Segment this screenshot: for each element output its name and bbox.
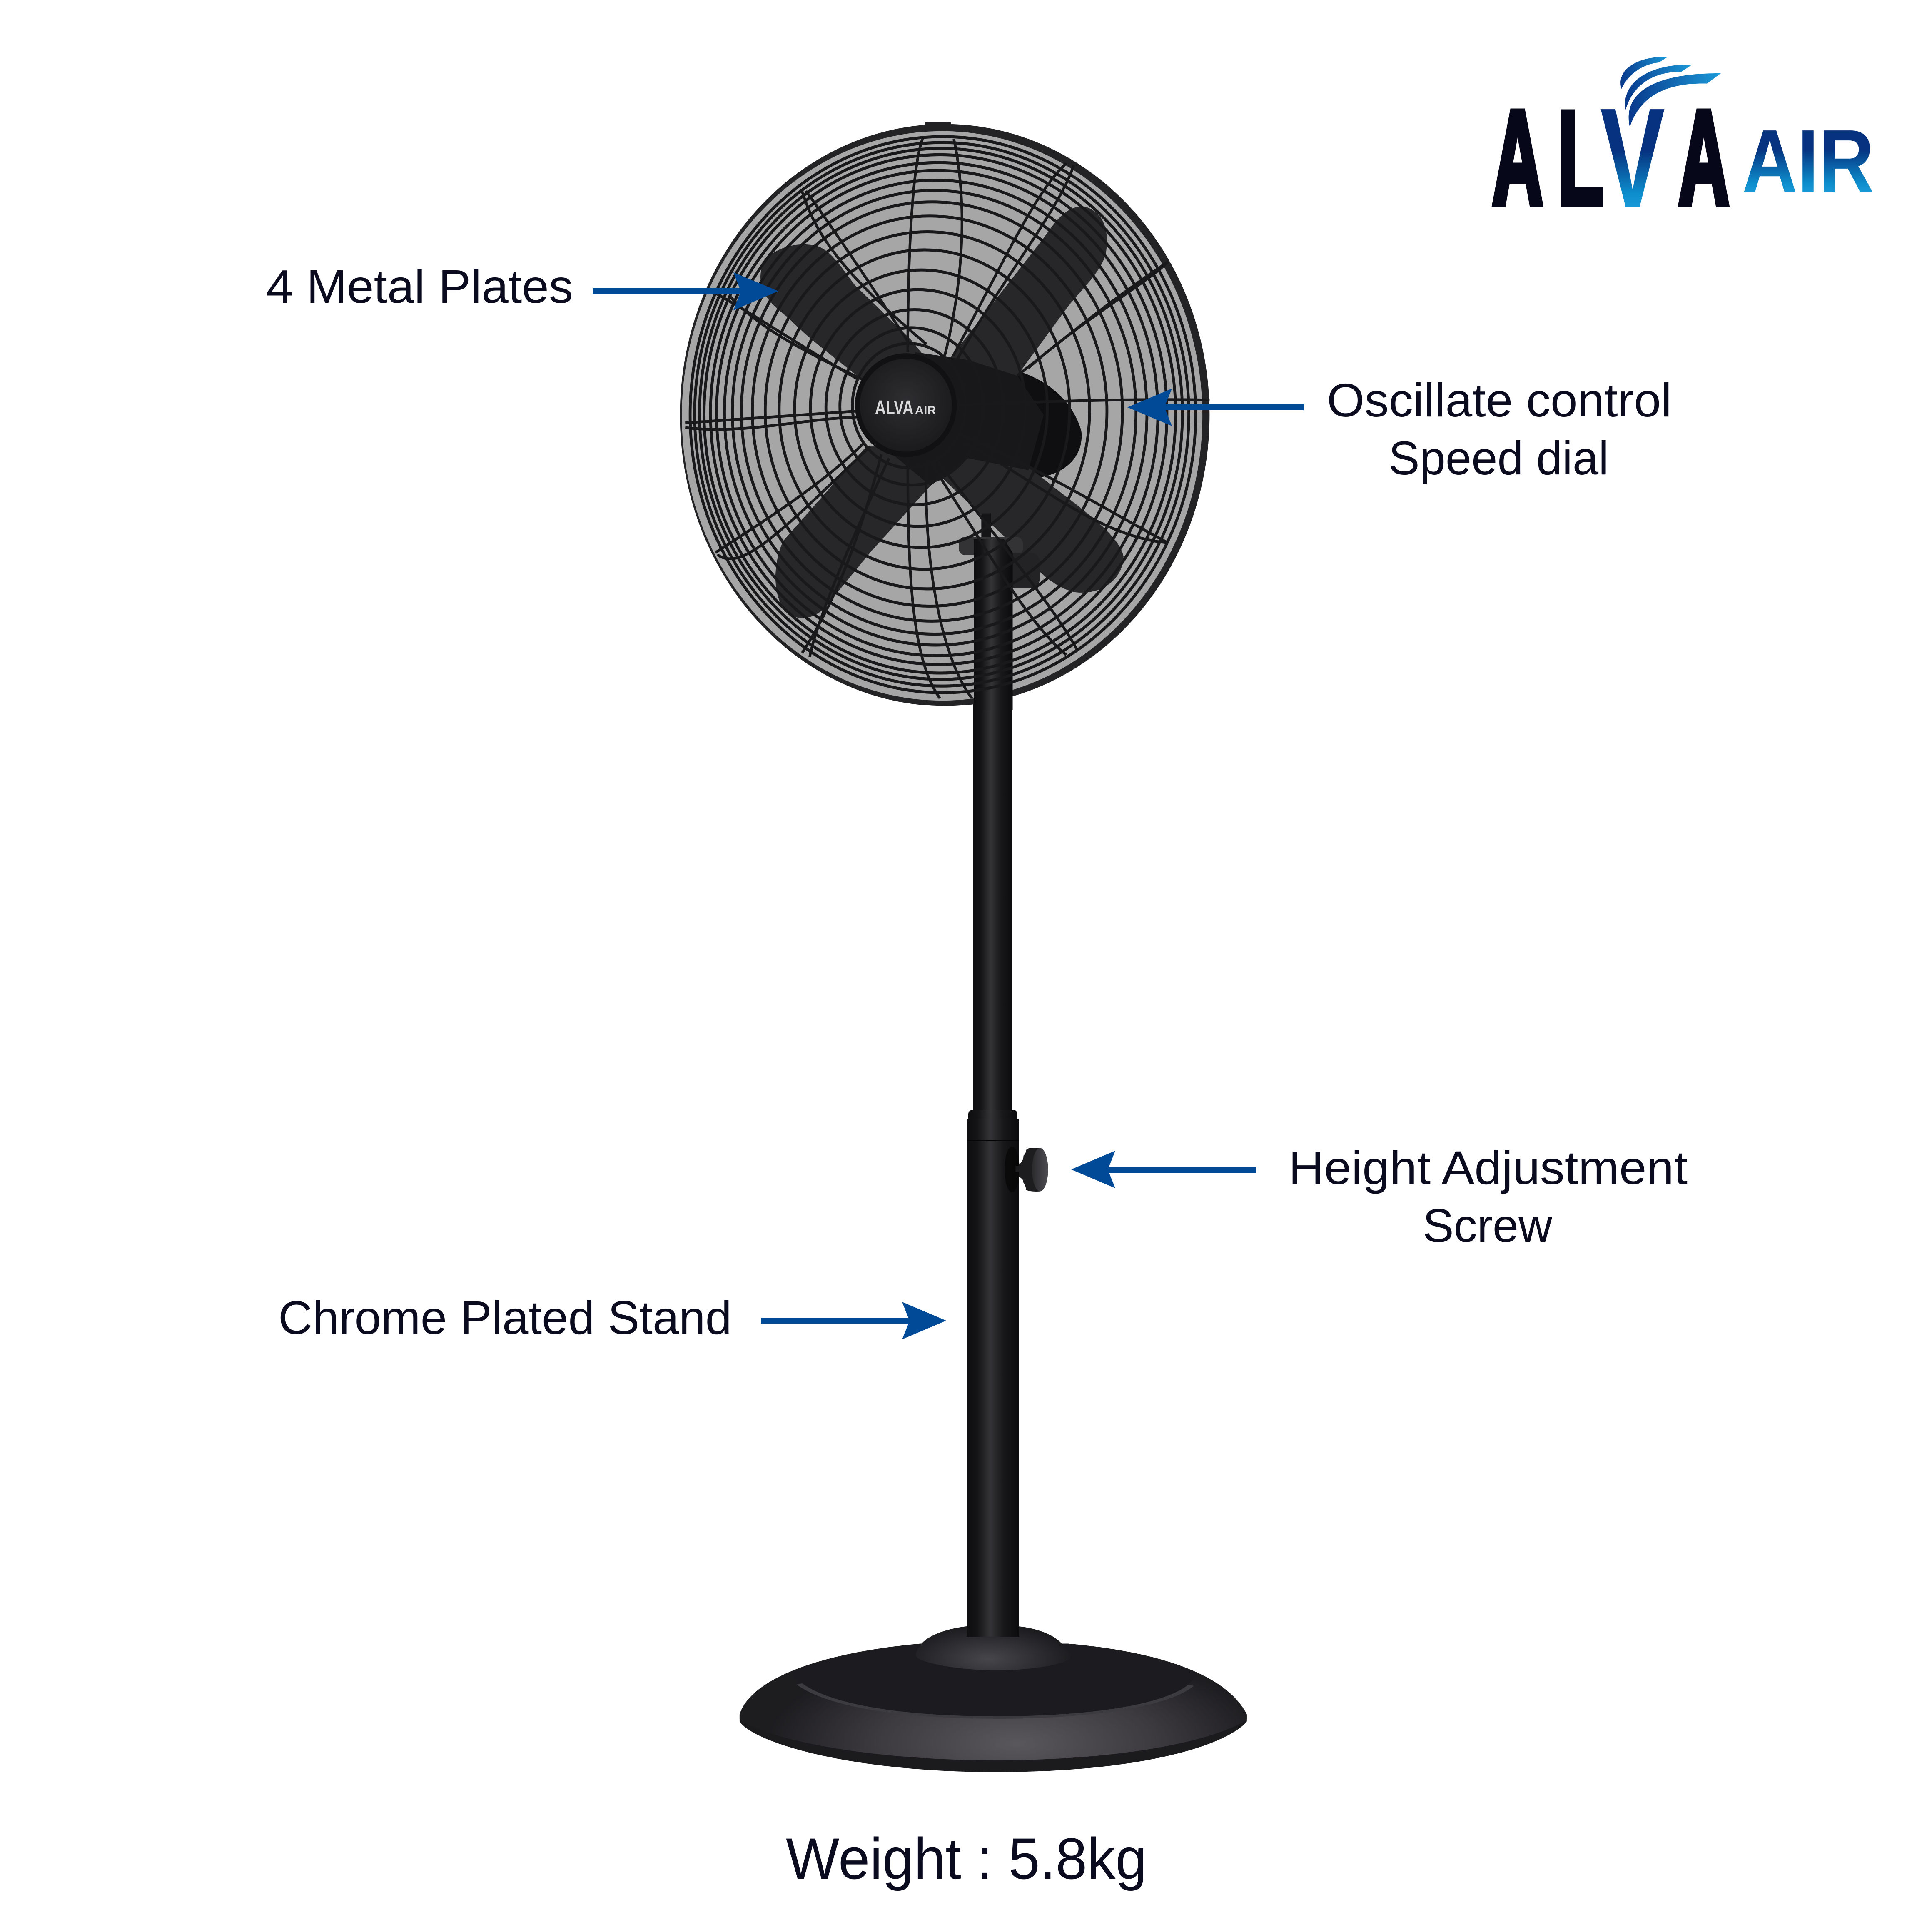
arrow: Oscillate control — [1127, 389, 1304, 426]
arrow: Height Adjustment Screw — [1071, 1151, 1256, 1188]
blade root mass — [892, 352, 1044, 486]
logo wordmark: ALVA: L — [1557, 83, 1604, 233]
upper pole — [973, 700, 1012, 1112]
label: Oscillate control / Speed dial: Speed dial — [1389, 432, 1609, 484]
blade: bottom left — [775, 446, 930, 618]
motor housing — [927, 365, 1082, 479]
grill ribs — [685, 138, 1209, 698]
label: Oscillate control / Speed dial — [1327, 374, 1672, 484]
base — [740, 1626, 1247, 1772]
logo: Alva Air — [1492, 57, 1874, 237]
logo wordmark: ALVA: V — [1600, 79, 1665, 237]
top clip — [925, 122, 951, 130]
label: Oscillate control / Speed dial: Oscillate control — [1327, 374, 1672, 426]
label: Height Adjustment Screw — [1289, 1142, 1688, 1252]
base collar — [916, 1626, 1071, 1670]
arrow: Chrome Plated Stand — [761, 1302, 946, 1339]
logo wordmark: ALVA — [1492, 79, 1729, 237]
label: Height Adjustment Screw: Height Adjustment — [1289, 1142, 1688, 1194]
outer rim — [680, 124, 1209, 706]
label: 4 Metal Plates: 4 Metal Plates — [266, 260, 573, 313]
label: Chrome Plated Stand: Chrome Plated Stand — [278, 1291, 732, 1344]
knob shadow on sleeve — [1005, 1147, 1020, 1192]
grill background — [682, 131, 1202, 701]
blade: bottom right — [938, 431, 1124, 593]
blade: top left — [760, 244, 930, 384]
icon: height adjustment knob — [1015, 1148, 1048, 1192]
arrow: 4 Metal Plates — [593, 272, 778, 310]
label: Weight: Weight : 5.8kg — [786, 1826, 1147, 1891]
logo wordmark: ALVA: A — [1492, 83, 1543, 233]
hub — [855, 353, 957, 457]
base ring highlight — [799, 1684, 1191, 1718]
grill rings — [690, 137, 1196, 693]
logo icon: wind feathers — [1620, 57, 1721, 127]
base rim — [740, 1644, 1247, 1772]
fan head — [680, 122, 1209, 710]
logo wordmark: AIR: AIR — [1742, 111, 1874, 211]
hub logo text: AIR — [915, 404, 936, 417]
hub logo text: ALVA — [875, 396, 913, 419]
base lower surface — [740, 1644, 1247, 1760]
lower sleeve — [967, 1110, 1020, 1637]
label: Height Adjustment Screw: Screw — [1423, 1199, 1552, 1252]
blade: top right — [945, 207, 1107, 415]
stand bracket and pole top — [959, 514, 1040, 710]
base top disc — [792, 1644, 1196, 1717]
logo wordmark: ALVA: A — [1678, 83, 1729, 233]
